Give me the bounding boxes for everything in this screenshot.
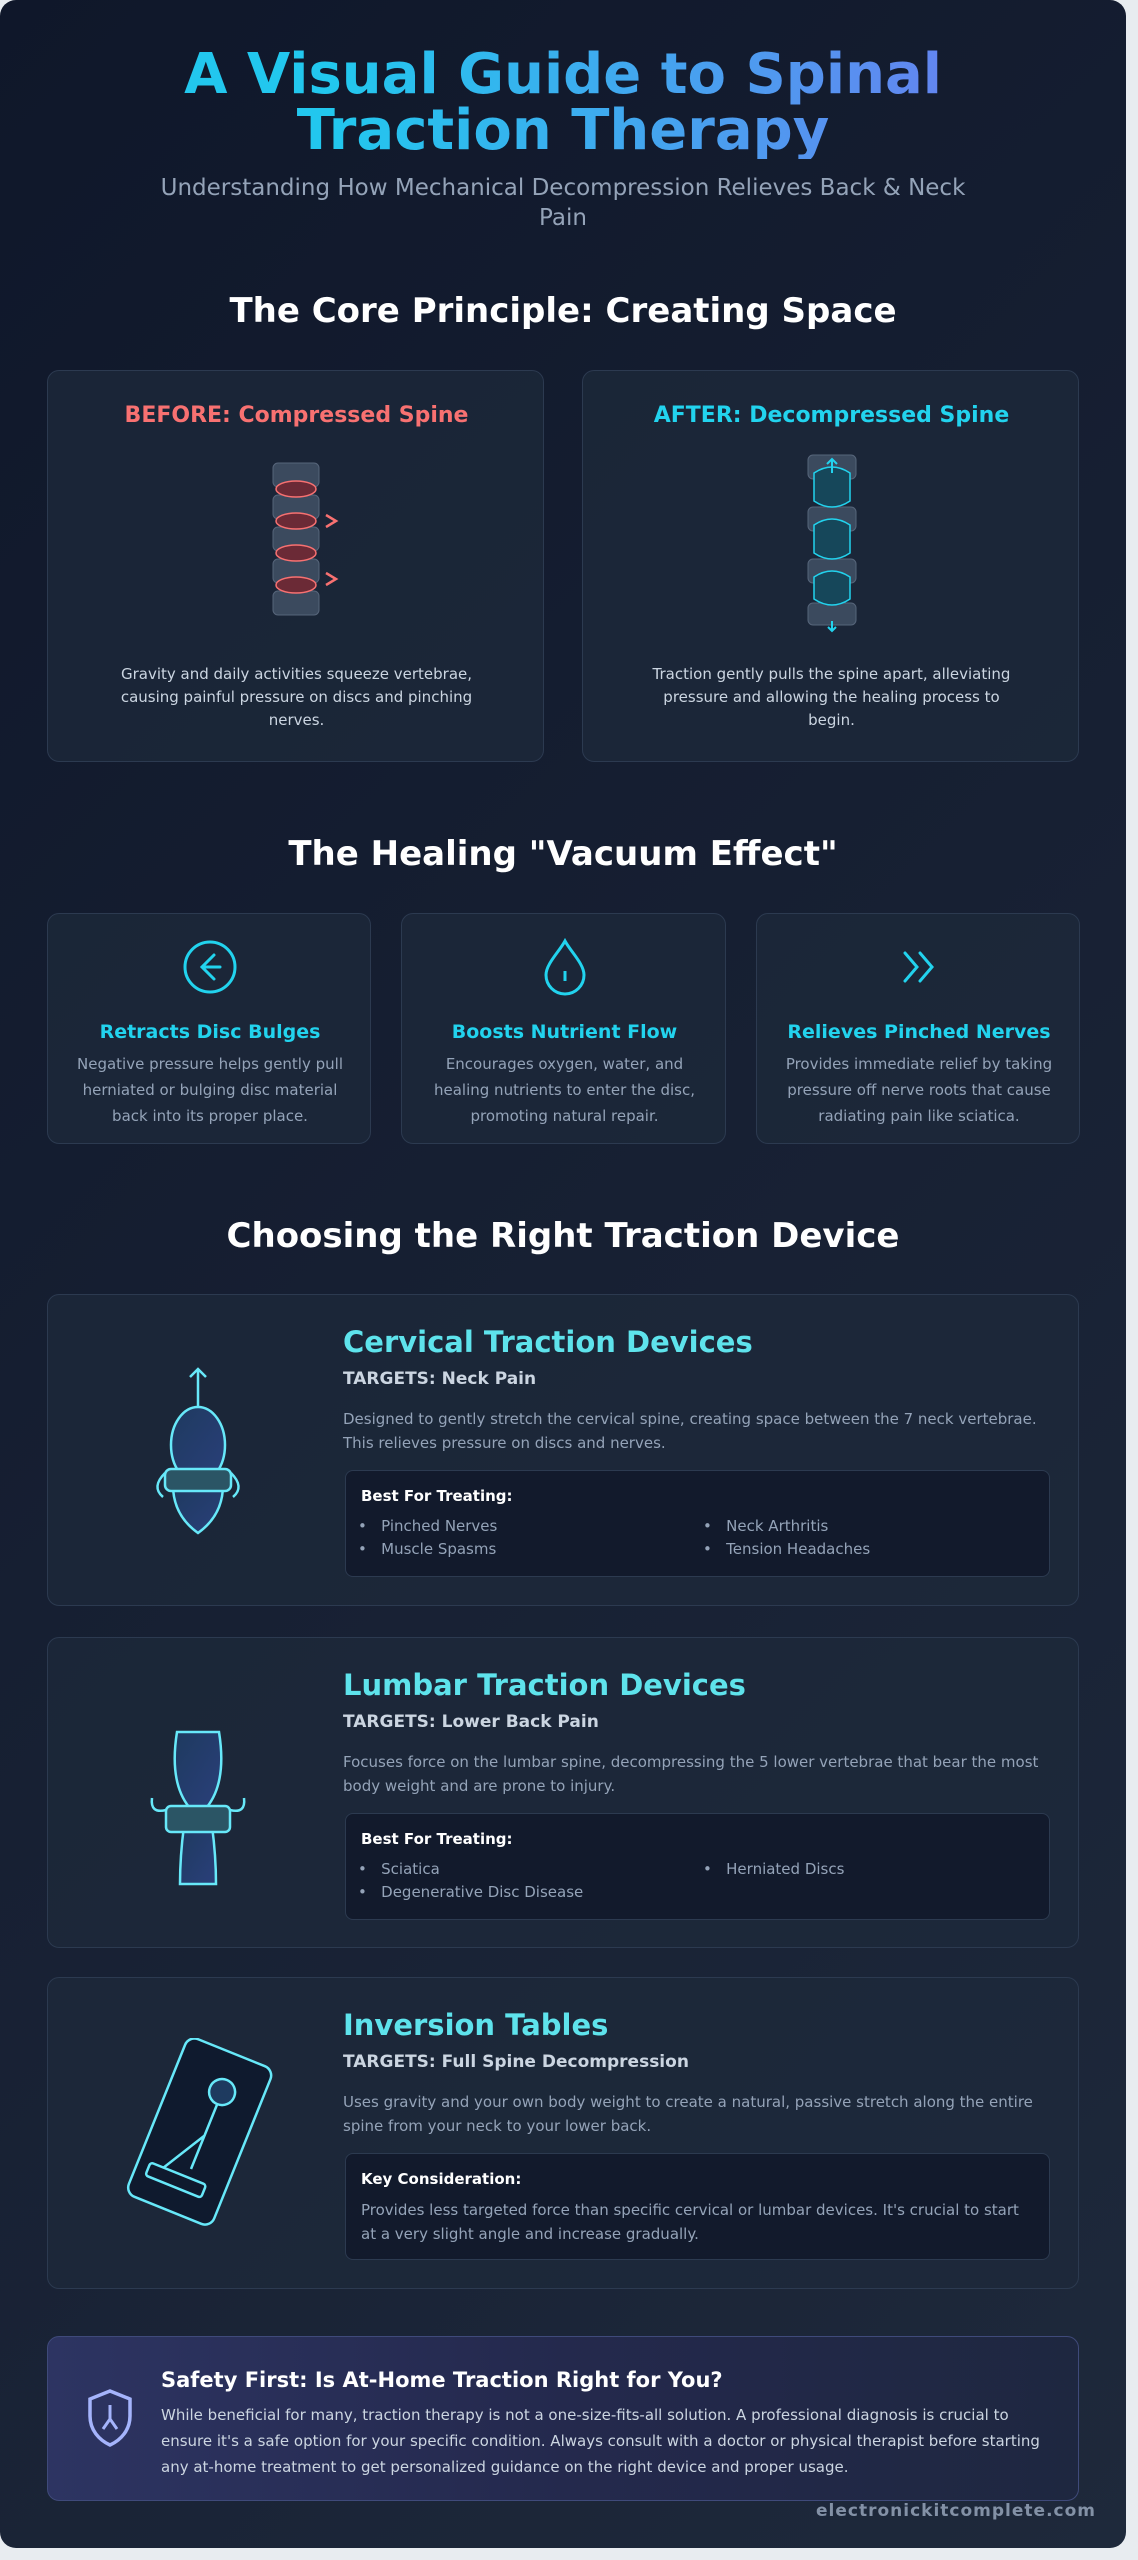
card: nerves (756, 913, 1080, 1144)
box: best for: • Herniated Discs (703, 1860, 844, 1878)
box: best for: Best For Treating: (361, 1487, 512, 1505)
heading: core principle: The Core Principle: Creating Space (229, 291, 897, 331)
panel: before (47, 370, 544, 762)
title: Cervical Traction Devices (343, 1325, 753, 1359)
after title: AFTER: Decompressed Spine (654, 403, 1009, 428)
panel: after (582, 370, 1079, 762)
panel: inversion (47, 1977, 1079, 2289)
targets: TARGETS: Neck Pain (343, 1369, 536, 1389)
card: nutrients (401, 913, 726, 1144)
icon: cervical (156, 1367, 240, 1534)
title: Retracts Disc Bulges (100, 1021, 320, 1043)
title: Boosts Nutrient Flow (452, 1021, 677, 1043)
title: A Visual Guide to Spinal (184, 42, 942, 107)
targets: TARGETS: Lower Back Pain (343, 1712, 599, 1732)
box: best for: • Sciatica (358, 1860, 440, 1878)
title (0, 47, 1126, 159)
footer: electronickitcomplete.com (816, 2501, 1096, 2521)
icon: left arrow circle (184, 940, 236, 994)
before title: BEFORE: Compressed Spine (125, 403, 468, 428)
heading: vacuum effect: The Healing "Vacuum Effect" (288, 834, 838, 874)
after text: Traction gently pulls the spine apart, alleviating pressure and allowing the healing process to begin. (653, 665, 1010, 729)
box: best for: • Tension Headaches (703, 1540, 870, 1558)
title: Inversion Tables (343, 2008, 608, 2042)
heading: devices: Choosing the Right Traction Device (227, 1216, 899, 1256)
box: best for (345, 1470, 1050, 1577)
description: Designed to gently stretch the cervical spine, creating space between the 7 neck vertebrae. This relieves pressure on discs and nerves. (343, 1410, 1037, 1452)
subtitle: Understanding How Mechanical Decompression Relieves Back & Neck Pain (161, 175, 965, 231)
targets: TARGETS: Full Spine Decompression (343, 2052, 689, 2072)
before text: Gravity and daily activities squeeze vertebrae, causing painful pressure on discs and pinching nerves. (121, 665, 472, 729)
title: Relieves Pinched Nerves (787, 1021, 1051, 1043)
box: key consideration: Provides less targeted force than specific cervical or lumbar devices. It's crucial to start at a very slight angle and increase gradually. (361, 2201, 1019, 2243)
box: best for: • Neck Arthritis (703, 1517, 828, 1535)
panel: cervical (47, 1294, 1079, 1606)
safety text: While beneficial for many, traction therapy is not a one-size-fits-all solution. A professional diagnosis is crucial to ensure it's a safe option for your specific condition. Always consult with a doctor or physical therapist before starting any at-home treatment to get personalized guidance on the right device and proper usage. (161, 2406, 1040, 2476)
description: Uses gravity and your own body weight to create a natural, passive stretch along the entire spine from your neck to your lower back. (343, 2093, 1033, 2135)
desc: Encourages oxygen, water, and healing nutrients to enter the disc, promoting natural repair. (434, 1055, 695, 1125)
safety title: Safety First: Is At-Home Traction Right for You? (161, 2368, 723, 2392)
icon: inversion table (126, 2038, 272, 2226)
icon: drop (544, 938, 586, 996)
desc: Negative pressure helps gently pull herniated or bulging disc material back into its proper place. (77, 1055, 343, 1125)
panel: lumbar (47, 1637, 1079, 1948)
icon: compressed spine (272, 462, 338, 616)
description: Focuses force on the lumbar spine, decompressing the 5 lower vertebrae that bear the most body weight and are prone to injury. (343, 1753, 1038, 1795)
icon: shield (88, 2389, 132, 2447)
box: best for: Best For Treating: (361, 1830, 512, 1848)
box: best for (345, 1813, 1050, 1920)
box: key consideration (345, 2153, 1050, 2260)
box: key consideration: Key Consideration: (361, 2170, 521, 2188)
icon: double chevron (903, 951, 934, 983)
box: best for: • Muscle Spasms (358, 1540, 496, 1558)
icon: lumbar (150, 1730, 246, 1886)
icon: decompressed spine (808, 454, 856, 632)
title: Lumbar Traction Devices (343, 1668, 746, 1702)
desc: Provides immediate relief by taking pressure off nerve roots that cause radiating pain like sciatica. (786, 1055, 1052, 1125)
callout: safety (47, 2336, 1079, 2501)
title: Traction Therapy (297, 98, 829, 163)
box: best for: • Degenerative Disc Disease (358, 1883, 583, 1901)
box: best for: • Pinched Nerves (358, 1517, 497, 1535)
card: retracts (47, 913, 371, 1144)
